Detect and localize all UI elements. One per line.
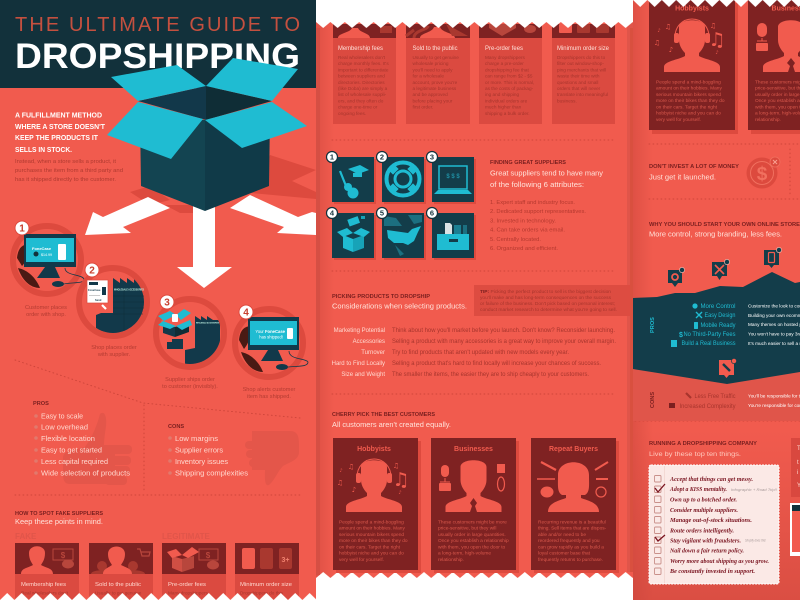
panel: middle page background — [316, 22, 633, 578]
step 4: shop alerts customer: 4 — [243, 308, 249, 318]
cards: continued supplier signs on middle page — [333, 24, 615, 124]
pros list: Low overhead — [41, 422, 88, 432]
notepad: top ten checklist: Shopify does this! — [745, 538, 766, 542]
step 4: shop alerts customer: item has shipped. — [247, 394, 291, 400]
callout: tip box: you'll make and has long-term consequences on the success — [480, 295, 612, 300]
intro text: KEEP THE PRODUCTS IT — [15, 133, 98, 142]
step 2: shop places order: FoneCase — [88, 288, 101, 292]
text: finding great suppliers: of the following 6 attributes: — [490, 182, 584, 189]
intro text: has it shipped directly to the customer. — [15, 177, 116, 183]
heading: running a dropshipping company — [649, 441, 757, 458]
text: finding great suppliers: 2. Dedicated support representatives. — [490, 209, 586, 215]
arrow shadows — [130, 155, 316, 213]
cards: continued supplier signs on middle page: waste their time with — [557, 74, 600, 79]
panel: left page background — [0, 0, 320, 600]
intro text: A FULFILLMENT METHOD — [15, 110, 103, 120]
cards: continued supplier signs on middle page: as the costs of packag- — [485, 86, 534, 91]
cons list — [168, 424, 248, 478]
cards: fake and legitimate supplier signs: 3+ — [282, 557, 289, 564]
text: finding great suppliers: 1. Expert staff and industry focus. — [490, 200, 575, 206]
cropped screenshot at right edge — [790, 503, 800, 556]
card: hobbyists continued: very well for yourself. — [656, 117, 701, 123]
icon: dollar coin with x badge — [746, 157, 780, 188]
card: repeat buyers: can grow rapidly as you build a — [538, 544, 604, 550]
card: hobbyists continued: ♫ — [654, 39, 660, 47]
card: hobbyists continued: hobbyist niche and you can do — [656, 110, 721, 116]
heading: how to spot fake suppliers: HOW TO SPOT FAKE SUPPLIERS — [15, 511, 103, 517]
step 4: shop alerts customer: Shop alerts customer — [243, 387, 296, 393]
card: hobbyists: ♪ — [352, 486, 356, 494]
card: repeat buyers: Repeat Buyers — [549, 446, 598, 453]
text: don't invest a lot of money: Just get it launched. — [649, 174, 716, 182]
text: finding great suppliers: Great suppliers tend to have many — [490, 170, 604, 178]
notepad: top ten checklist: Manage out-of-stock situations. — [669, 517, 752, 524]
heading: running a dropshipping company: RUNNING A DROPSHIPPING COMPANY — [649, 441, 757, 447]
table: product considerations: Hard to Find Locally — [332, 361, 385, 367]
card: repeat buyers — [531, 438, 619, 573]
intro text: SELLS IN STOCK. — [15, 145, 72, 154]
card: hobbyists: on their cars. Target the right — [339, 544, 401, 550]
cons list: Supplier errors — [175, 446, 223, 454]
icon: map of USA — [384, 215, 422, 256]
chart: pros and cons mountain band: Less Free Traffic — [694, 394, 736, 400]
header band — [0, 0, 316, 88]
title: DROPSHIPPING — [15, 37, 300, 76]
table: product considerations: Size and Weight — [341, 372, 385, 378]
step 2: shop places order: 2 — [89, 266, 95, 276]
step 4: shop alerts customer: Your FoneCase — [255, 329, 286, 334]
heading: why start your own store: More control, strong branding, less fees. — [649, 232, 782, 238]
icon: laptop — [434, 166, 472, 194]
card: hobbyists continued: ♪ — [715, 50, 719, 56]
chart: pros and cons mountain band: PROS — [650, 317, 656, 333]
cards: continued supplier signs on middle page: charge monthly fees. It's — [338, 61, 389, 66]
pros list: Less capital required — [41, 457, 108, 466]
card: hobbyists continued: ♪ — [669, 46, 673, 54]
cards: fake and legitimate supplier signs: Pre-order fees — [168, 582, 206, 588]
step 3: supplier ships order: Supplier ships order — [165, 377, 215, 383]
chart: pros and cons mountain band: $ — [679, 332, 683, 339]
card: businesses continued — [748, 0, 800, 134]
table: product considerations: The smaller the items, the easier they are to ship cheaply to your customers. — [392, 372, 589, 378]
heading: cherry pick customers: All customers aren't created equally. — [332, 422, 451, 429]
cards: fake and legitimate supplier signs: Real wholesalers don't — [21, 590, 69, 596]
chart: pros and cons mountain band: More Control — [700, 304, 736, 310]
cards: continued supplier signs on middle page: Membership fees — [338, 46, 383, 52]
cards: continued supplier signs on middle page: business. — [557, 98, 577, 103]
card: hobbyists: very well for yourself. — [339, 557, 384, 563]
card: hobbyists: more on their bikes than they do — [339, 538, 408, 544]
table: product considerations — [332, 328, 616, 378]
cards: continued supplier signs on middle page: questions and small — [557, 80, 598, 85]
cards: continued supplier signs on middle page: first order. — [412, 105, 433, 110]
heading: cherry pick customers: CHERRY PICK THE BEST CUSTOMERS — [332, 412, 435, 418]
table: product considerations: Turnover — [361, 350, 385, 356]
title — [15, 14, 300, 76]
cards: continued supplier signs on middle page: account, prove you're — [412, 80, 458, 85]
text: don't invest a lot of money: DON'T INVEST A LOT OF MONEY — [649, 164, 739, 170]
intro text — [15, 110, 123, 183]
card: businesses — [431, 438, 519, 573]
cards: continued supplier signs on middle page: filter out window-shop- — [557, 61, 604, 66]
number badges — [326, 152, 438, 218]
pin: more control — [668, 267, 685, 287]
intro text: purchases the item from a third party and — [15, 168, 123, 174]
heading: running a dropshipping company: Live by these top ten things. — [649, 451, 741, 458]
cards: continued supplier signs on middle page: before placing your — [412, 98, 453, 103]
cards: continued supplier signs on middle page: ing and shipping — [485, 92, 520, 97]
heading: picking products: PICKING PRODUCTS TO DROPSHIP — [332, 294, 430, 300]
text: finding great suppliers: 5. Centrally located. — [490, 237, 541, 243]
zigzag edge: middle page top — [316, 22, 633, 28]
chart: pros and cons mountain band: Mobile Ready — [700, 323, 736, 329]
step 2: shop places order: Shop places order — [91, 345, 137, 351]
callout: tip box: conduct market research to determine what you're going to sell. — [480, 307, 617, 312]
card: businesses: These customers might be more — [438, 520, 507, 526]
cards: fake and legitimate supplier signs: Membership fees — [21, 582, 66, 588]
cards: continued supplier signs on middle page: and be approved — [412, 92, 448, 97]
cropped tip box at right edge: t — [797, 460, 799, 466]
chart: pros and cons mountain band: Increased Complexity — [680, 404, 736, 410]
pros list: Easy to scale — [41, 412, 83, 420]
card: hobbyists continued: ♫ — [665, 23, 671, 31]
chart: pros and cons mountain band: Build a Real Business — [682, 341, 736, 347]
card: hobbyists: ♫ — [337, 479, 343, 487]
cards: continued supplier signs on middle page: ping merchants that will — [557, 67, 606, 72]
step 3: supplier ships order — [156, 295, 224, 390]
cards: continued supplier signs on middle page: Pre-order fees — [485, 46, 523, 52]
card: hobbyists: Hobbyists — [357, 446, 391, 453]
chart: pros and cons mountain band — [633, 247, 800, 421]
cards: continued supplier signs on middle page: charge one-time or — [338, 105, 378, 110]
zigzag edge: left page bottom — [0, 593, 316, 600]
table: product considerations: Try to find products that aren't updated with new models every year. — [392, 350, 569, 356]
table: product considerations: Marketing Potential — [334, 328, 385, 334]
icon: thumb down — [245, 431, 299, 485]
cards: continued supplier signs on middle page: wholesale pricing — [412, 61, 449, 66]
card: hobbyists: ♫ — [393, 462, 399, 470]
chart: pros and cons mountain band: Easy Design — [704, 313, 736, 319]
pros list: PROS — [33, 401, 49, 407]
card: repeat buyers: thing. Sell items that are dispos- — [538, 526, 607, 532]
cards: continued supplier signs on middle page: for a wholesale — [412, 74, 444, 79]
cards: continued supplier signs on middle page: ers, and they often do — [338, 98, 384, 103]
cards: fake and legitimate supplier signs: Usually to get genuine — [95, 590, 142, 596]
notepad: top ten checklist: Accept that things can get messy. — [669, 476, 753, 483]
step 1: customer places order: Customer places — [25, 305, 67, 311]
table: product considerations: Selling a product that's hard to find locally will increase your chances of success. — [392, 361, 601, 367]
card: hobbyists continued: serious mountain bikers spend — [656, 92, 721, 98]
step 1: customer places order: order with shop. — [26, 312, 66, 318]
card: businesses: Businesses — [454, 446, 493, 453]
card: hobbyists continued: ♫ — [708, 29, 726, 51]
card: businesses: a long-term, high-volume — [438, 551, 491, 557]
card: repeat buyers: loyal customer base that — [538, 551, 591, 557]
cards: continued supplier signs on middle page: individual orders are — [485, 98, 528, 103]
table: product considerations: Selling a product with many accessories is a great way to improve your overall margin. — [392, 339, 616, 345]
cards: continued supplier signs on middle page: Usually to get genuine — [412, 55, 459, 60]
text: finding great suppliers: FINDING GREAT SUPPLIERS — [490, 160, 566, 166]
step 2: shop places order: Send — [95, 298, 102, 302]
cards: continued supplier signs on middle page: charge a pre-order — [485, 61, 524, 66]
card: hobbyists continued: ♫ — [710, 22, 716, 30]
notepad: top ten checklist: Infographic + Road Trip!! — [731, 488, 777, 492]
icon grid: six supplier attributes: 6 — [430, 209, 434, 218]
card: hobbyists continued: more on their bikes than they do — [656, 98, 725, 104]
pin: less free traffic — [719, 358, 737, 378]
card: repeat buyers: frequently returns to purchase. — [538, 557, 603, 563]
cards: fake and legitimate supplier signs: $ — [206, 551, 211, 560]
notepad: top ten checklist: Consider multiple suppliers. — [670, 507, 738, 514]
dotted dividers left page — [15, 360, 300, 495]
card: hobbyists: amount on their hobbies. Many — [339, 526, 405, 532]
cons list: Shipping complexities — [175, 468, 248, 478]
icon: thumb up — [63, 413, 132, 485]
step 1: customer places order: FoneCase — [32, 246, 52, 251]
cards: continued supplier signs on middle page: can range from $2 - $5 — [485, 74, 533, 79]
cards: continued supplier signs on middle page: Minimum order size — [557, 46, 610, 52]
card: hobbyists continued — [649, 0, 738, 134]
notepad: top ten checklist: Be constantly invested in support. — [669, 568, 755, 575]
cropped tip box at right edge: i — [797, 470, 798, 476]
table: product considerations: Think about how you'll market before you launch. Don't know? Reconsider launching. — [392, 328, 615, 334]
callout: tip box: or failure of the business. Don't pick based on personal interest; — [480, 301, 615, 306]
callout: tip box: TIP: Picking the perfect product to sell is the biggest decision — [480, 289, 612, 294]
heading: picking products: Considerations when selecting products. — [332, 304, 467, 310]
card: hobbyists: ♪ — [398, 490, 402, 496]
cards: continued supplier signs on middle page: a legitimate business — [412, 86, 457, 91]
card: hobbyists continued: amount on their hobbies. Many — [656, 86, 722, 92]
icon grid: six supplier attributes: 5 — [380, 209, 384, 218]
step 1: customer places order — [13, 221, 84, 318]
pros list: Wide selection of products — [41, 468, 130, 478]
card: hobbyists continued: People spend a mind-boggling — [656, 80, 721, 86]
card: businesses: relationship. — [438, 557, 464, 563]
icon: dollar coin with x badge: $ — [757, 164, 768, 185]
cards: continued supplier signs on middle page: translate into meaningful — [557, 92, 608, 97]
cards: fake and legitimate supplier signs: Dropshippers do this — [240, 590, 284, 596]
step 1: customer places order: 1 — [19, 224, 25, 234]
heading: why start your own store: WHY YOU SHOULD START YOUR OWN ONLINE STORE — [649, 222, 800, 228]
cards: continued supplier signs on middle page: Sold to the public — [412, 46, 458, 52]
icon grid: six supplier attributes — [326, 152, 476, 260]
icon: open shipping box — [107, 58, 307, 211]
cards: fake and legitimate supplier signs — [15, 543, 299, 600]
card: hobbyists continued: Hobbyists — [675, 6, 709, 12]
panel: right page background — [630, 0, 800, 600]
cards: continued supplier signs on middle page: orders that will never — [557, 86, 601, 91]
cards: continued supplier signs on middle page: list of wholesale suppli- — [338, 92, 387, 97]
card: repeat buyers: reordered frequently and you — [538, 538, 600, 544]
card: hobbyists: People spend a mind-boggling — [339, 520, 404, 526]
cards: continued supplier signs on middle page: or more. This is normal, — [485, 80, 534, 85]
icon: guitar and graduation cap — [340, 165, 369, 198]
card: hobbyists — [333, 438, 421, 573]
notepad: top ten checklist: Route orders intelligently. — [669, 528, 734, 534]
heading: how to spot fake suppliers — [15, 511, 211, 541]
cropped tip box at right edge — [791, 438, 800, 497]
cards: continued supplier signs on middle page: (like Doba) are simply a — [338, 86, 388, 91]
card: hobbyists: ♫ — [348, 463, 354, 471]
cons list: Inventory issues — [175, 457, 228, 466]
step 2: shop places order — [79, 263, 147, 358]
cards: fake and legitimate supplier signs: $ — [61, 551, 66, 560]
step 3: supplier ships order: to customer (invisibly). — [162, 384, 218, 390]
pin: easy design — [712, 259, 730, 280]
pros list: Flexible location — [41, 434, 95, 443]
heading: how to spot fake suppliers: FAKE — [15, 532, 37, 541]
icon: laptop: $ $ $ — [446, 174, 460, 180]
intro text: Instead, when a store sells a product, it — [15, 159, 116, 165]
step 3: supplier ships order: WHOLESALE ACCESSORIES — [196, 322, 219, 324]
notepad: top ten checklist: Worry more about shipping as you grow. — [670, 558, 769, 565]
cards: continued supplier signs on middle page: Dropshippers do this to — [557, 55, 606, 60]
pin: mobile ready — [764, 247, 782, 268]
step 4: shop alerts customer: has shipped! — [259, 334, 283, 340]
cards: fake and legitimate supplier signs: Many dropshippers — [168, 590, 209, 596]
intro text: WHERE A STORE DOESN'T — [15, 122, 105, 131]
heading: how to spot fake suppliers: Keep these points in mind. — [15, 519, 103, 526]
cards: fake and legitimate supplier signs: Minimum order size — [240, 582, 292, 588]
notepad: top ten checklist: Nail down a fair return policy. — [669, 548, 744, 554]
card: repeat buyers: Recurring revenue is a beautiful — [538, 520, 606, 526]
notepad: top ten checklist: Own up to a botched order. — [670, 496, 737, 504]
heading: picking products — [332, 294, 467, 310]
card: hobbyists: hobbyist niche and you can do — [339, 551, 404, 557]
heading: cherry pick customers — [332, 412, 451, 429]
cards: continued supplier signs on middle page: Many dropshippers — [485, 55, 526, 60]
icon grid: six supplier attributes: 2 — [380, 153, 384, 162]
card: businesses: with them, you open the door to — [438, 544, 506, 550]
cards: continued supplier signs on middle page: you'll need to apply — [412, 67, 453, 72]
card: hobbyists: serious mountain bikers spend — [339, 532, 404, 538]
step 3: supplier ships order: 3 — [164, 298, 170, 308]
cards: fake and legitimate supplier signs: Sold to the public — [95, 582, 141, 588]
heading: why start your own store — [649, 222, 800, 238]
card: hobbyists: ♫ — [392, 469, 410, 491]
icon: file drawer — [437, 223, 469, 250]
notepad: top ten checklist: Stay vigilant with fraudsters. — [670, 538, 741, 544]
cons list: Low margins — [175, 434, 218, 443]
card: hobbyists: ♪ — [339, 468, 343, 474]
cards: continued supplier signs on middle page: between suppliers and — [338, 74, 385, 79]
text: finding great suppliers — [490, 160, 604, 252]
table: product considerations: Accessories — [353, 339, 385, 345]
callout: tip box — [474, 285, 631, 316]
icon grid: six supplier attributes: 3 — [430, 153, 434, 162]
chart: pros and cons mountain band: CONS — [650, 392, 656, 408]
cards: continued supplier signs on middle page: directories. Directories — [338, 80, 385, 85]
cards: continued supplier signs on middle page: Real wholesalers don't — [338, 55, 386, 60]
card: repeat buyers: able and/or need to be — [538, 532, 586, 538]
card: businesses: price-sensitive, but they will — [438, 526, 496, 532]
heading: how to spot fake suppliers: LEGITIMATE — [162, 532, 211, 541]
arrows: three white arrows leaving the box — [85, 195, 316, 288]
icon: box with envelope — [337, 216, 370, 252]
dotted dividers middle page — [332, 140, 615, 394]
step 2: shop places order: WHOLESALE ACCESSORIES — [114, 288, 144, 292]
chart: pros and cons mountain band: No Third-Party Fees — [684, 332, 736, 338]
step 2: shop places order: with supplier. — [97, 352, 131, 358]
cons list: CONS — [168, 424, 184, 430]
pros list — [33, 401, 130, 478]
card: businesses continued: relationship. — [755, 117, 781, 123]
pros list: Easy to get started — [41, 446, 102, 454]
icon grid: six supplier attributes: 1 — [330, 153, 334, 162]
cards: continued supplier signs on middle page: ongoing fees. — [338, 111, 366, 116]
text: finding great suppliers: 4. Can take orders via email. — [490, 228, 565, 234]
zigzag edge: right page top — [633, 0, 800, 7]
card: businesses: Once you establish a relationship — [438, 538, 509, 544]
cards: continued supplier signs on middle page: shipping a bulk order. — [485, 111, 530, 116]
text: don't invest a lot of money — [649, 164, 739, 182]
card: businesses: usually order in large quantities. — [438, 532, 506, 538]
card: hobbyists continued: ♪ — [657, 28, 661, 34]
cards: continued supplier signs on middle page: dropshipping fee that — [485, 67, 529, 72]
icon: lifebuoy — [386, 162, 420, 196]
step 1: customer places order: $14.99 — [41, 253, 52, 257]
cards: continued supplier signs on middle page: much higher than — [485, 105, 522, 110]
text: finding great suppliers: 6. Organized and efficient. — [490, 246, 558, 252]
card: hobbyists continued: on their cars. Target the right — [656, 104, 718, 110]
text: finding great suppliers: 3. Invested in technology. — [490, 218, 556, 224]
notepad: top ten checklist: Adopt a KISS mentality. — [669, 486, 727, 493]
dotted dividers right page — [635, 144, 800, 421]
icon grid: six supplier attributes: 4 — [330, 209, 335, 218]
cards: continued supplier signs on middle page: important to differentiate — [338, 67, 389, 72]
notepad: top ten checklist — [649, 465, 779, 584]
title: THE ULTIMATE GUIDE TO — [15, 14, 300, 36]
step 4: shop alerts customer — [235, 305, 308, 400]
